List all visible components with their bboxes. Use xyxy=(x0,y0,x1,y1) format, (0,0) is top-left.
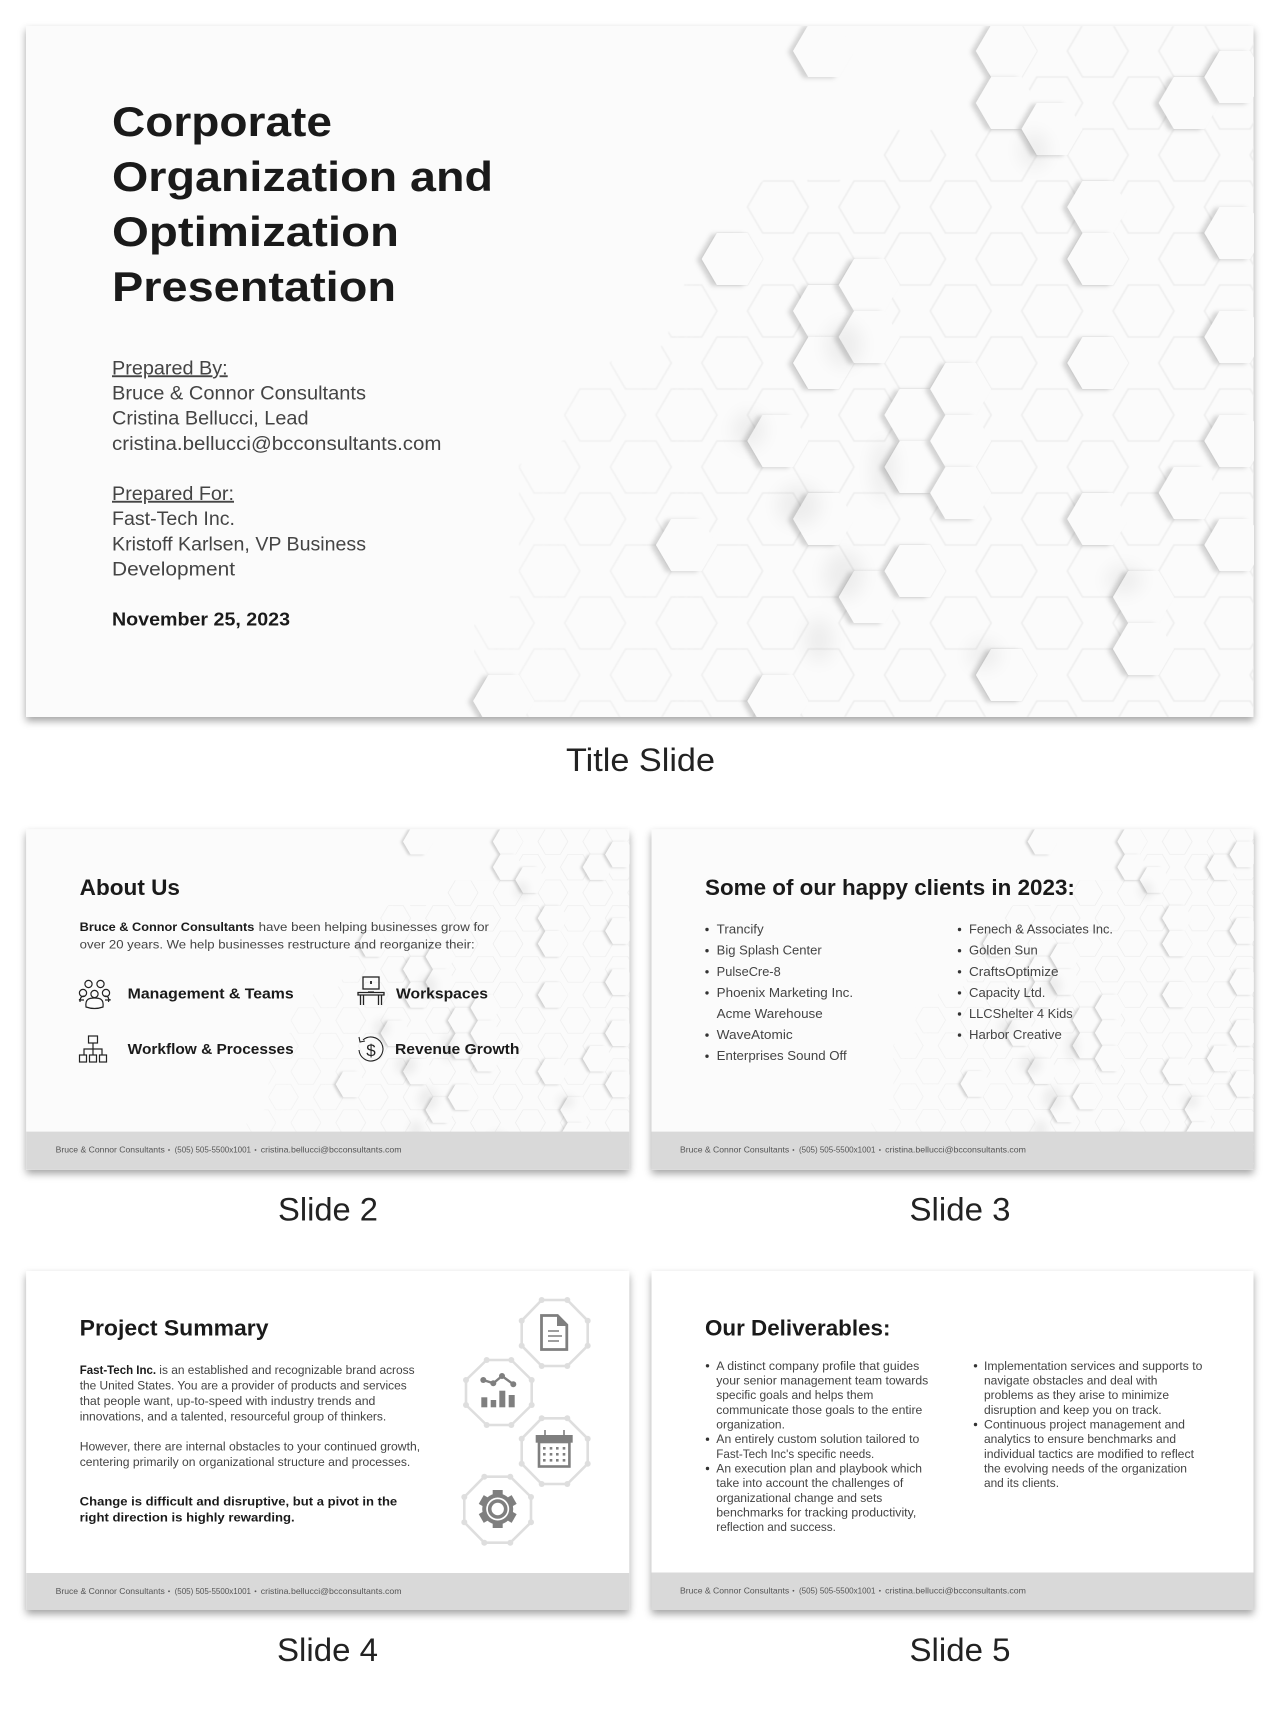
deliverables list: right column: problems as they arise to minimize xyxy=(984,1388,1169,1402)
paragraph: obstacles: However, there are internal obstacles to your continued growth, xyxy=(80,1440,420,1454)
client list: right column: Capacity Ltd. xyxy=(969,986,1045,1000)
title: Corporate xyxy=(112,98,332,145)
text block: prepared for: Development xyxy=(112,560,236,580)
deliverables list: left column: your senior management team towards xyxy=(716,1374,928,1388)
paragraph: company description: that people want, up-to-speed with industry trends and xyxy=(80,1394,376,1408)
footer bar: cristina.bellucci@bcconsultants.com xyxy=(261,1586,402,1596)
text block: prepared for: Kristoff Karlsen, VP Business xyxy=(112,534,366,555)
paragraph: company description: is an established and recognizable brand across xyxy=(159,1363,415,1377)
paragraph: company description: innovations, and a talented, resourceful group of thinkers. xyxy=(80,1409,386,1423)
footer bar: (505) 505-5500x1001 xyxy=(799,1145,876,1155)
footer bar xyxy=(652,1132,1254,1170)
paragraph: company description xyxy=(80,1363,415,1423)
deliverables list: right column: Implementation services and supports to xyxy=(984,1359,1202,1373)
callout: change statement: right direction is highly rewarding. xyxy=(80,1510,295,1524)
heading: Our Deliverables: xyxy=(705,1316,890,1341)
text block: prepared by: cristina.bellucci@bcconsultants.com xyxy=(112,434,441,455)
label: revenue growth: Revenue Growth xyxy=(395,1041,519,1058)
text block: prepared for xyxy=(112,484,366,580)
deliverables list: left column: An entirely custom solution tailored to xyxy=(716,1432,919,1446)
label: workspaces: Workspaces xyxy=(396,986,488,1002)
deliverables list: right column: and its clients. xyxy=(984,1476,1059,1490)
deliverables list: right column: navigate obstacles and deal with xyxy=(984,1374,1158,1388)
client list: left column: Big Splash Center xyxy=(717,944,822,958)
client list: left column: PulseCre-8 xyxy=(717,965,781,979)
date: November 25, 2023 xyxy=(112,609,290,629)
deliverables list: left column: An execution plan and playbook which xyxy=(716,1462,922,1476)
panel: slide 3 clients xyxy=(652,829,1259,1173)
text block: prepared by: Cristina Bellucci, Lead xyxy=(112,408,308,430)
footer bar: cristina.bellucci@bcconsultants.com xyxy=(261,1145,402,1155)
title: Presentation xyxy=(112,263,396,310)
text block: prepared for: Fast-Tech Inc. xyxy=(112,509,235,530)
deliverables list: right column: disruption and keep you on track. xyxy=(984,1403,1162,1417)
icon: gear in octagon xyxy=(461,1474,534,1546)
caption: slide 5: Slide 5 xyxy=(910,1632,1010,1668)
title: Optimization xyxy=(112,208,399,255)
paragraph: company description: the United States. You are a provider of products and services xyxy=(80,1379,407,1393)
footer bar: Bruce & Connor Consultants xyxy=(680,1145,789,1155)
footer bar: (505) 505-5500x1001 xyxy=(799,1586,876,1596)
icon: analytics chart in octagon xyxy=(463,1357,535,1428)
footer bar: Bruce & Connor Consultants xyxy=(56,1145,165,1155)
text block: prepared by: Prepared By: xyxy=(112,358,228,379)
title xyxy=(112,98,493,310)
client list: left column: WaveAtomic xyxy=(717,1028,793,1042)
icon: workspace desk xyxy=(358,977,384,1005)
paragraph: obstacles xyxy=(80,1440,420,1469)
intro text: have been helping businesses grow for xyxy=(259,920,489,934)
icon: revenue dollar cycle: $ xyxy=(366,1041,376,1060)
client list: left column: Acme Warehouse xyxy=(717,1007,823,1021)
deliverables list: left column: benchmarks for tracking productivity, xyxy=(716,1506,916,1520)
heading: Some of our happy clients in 2023: xyxy=(705,875,1075,900)
text block: prepared by: Bruce & Connor Consultants xyxy=(112,383,366,404)
footer bar: (505) 505-5500x1001 xyxy=(175,1586,251,1596)
deliverables list: right column: analytics to ensure benchmarks and xyxy=(984,1432,1176,1446)
deliverables list: right column: the evolving needs of the organization xyxy=(984,1462,1187,1476)
panel: slide 5 deliverables xyxy=(652,1271,1254,1610)
client list: right column xyxy=(958,922,1113,1042)
footer bar xyxy=(26,1573,629,1610)
footer bar: (505) 505-5500x1001 xyxy=(175,1145,251,1155)
deliverables list: right column: individual tactics are modified to reflect xyxy=(984,1447,1195,1461)
icon: management team xyxy=(79,980,110,1008)
client list: right column: Fenech & Associates Inc. xyxy=(969,922,1113,936)
client list: right column: Harbor Creative xyxy=(969,1028,1062,1042)
panel: title slide xyxy=(26,25,1265,727)
caption: slide 3: Slide 3 xyxy=(910,1192,1010,1228)
text block: prepared by xyxy=(112,358,441,455)
footer bar: Bruce & Connor Consultants xyxy=(680,1586,789,1596)
paragraph: company description: Fast-Tech Inc. xyxy=(80,1363,156,1377)
intro text: Bruce & Connor Consultants xyxy=(80,920,254,934)
callout: change statement xyxy=(80,1495,397,1524)
footer bar: cristina.bellucci@bcconsultants.com xyxy=(885,1145,1026,1155)
caption: title slide: Title Slide xyxy=(566,742,715,778)
footer bar: cristina.bellucci@bcconsultants.com xyxy=(885,1586,1026,1596)
client list: right column: Golden Sun xyxy=(969,944,1038,958)
deliverables list: right column xyxy=(974,1359,1202,1490)
deliverables list: left column: specific goals and helps them xyxy=(716,1388,873,1402)
panel: slide 2 about us xyxy=(26,829,635,1174)
client list: right column: CraftsOptimize xyxy=(969,965,1058,979)
icon: revenue dollar cycle xyxy=(359,1037,383,1061)
background: hexagon texture xyxy=(246,829,635,1174)
label: management and teams: Management & Teams xyxy=(128,986,294,1002)
client list: left column: Enterprises Sound Off xyxy=(717,1049,847,1063)
deliverables list: left column: communicate those goals to the entire xyxy=(716,1403,922,1417)
heading: Project Summary xyxy=(80,1316,269,1341)
paragraph: obstacles: centering primarily on organizational structure and processes. xyxy=(80,1455,410,1469)
background: hexagon texture xyxy=(871,829,1259,1173)
icon: calendar in octagon xyxy=(519,1415,591,1487)
heading: About Us xyxy=(80,875,180,900)
footer bar: Bruce & Connor Consultants xyxy=(56,1586,165,1596)
client list: left column: Phoenix Marketing Inc. xyxy=(717,986,853,1000)
intro text xyxy=(80,920,489,952)
footer bar xyxy=(652,1572,1254,1610)
caption: slide 4: Slide 4 xyxy=(277,1632,378,1668)
deliverables list: right column: Continuous project management and xyxy=(984,1418,1185,1432)
caption: slide 2: Slide 2 xyxy=(278,1192,378,1228)
deliverables list: left column: take into account the challenges of xyxy=(716,1476,904,1490)
deliverables list: left column: organization. xyxy=(716,1418,785,1432)
client list: left column xyxy=(705,922,853,1063)
deliverables list: left column: A distinct company profile that guides xyxy=(716,1359,919,1373)
icon: workflow org chart xyxy=(80,1036,106,1062)
text block: prepared for: Prepared For: xyxy=(112,484,234,505)
deliverables list: left column: Fast-Tech Inc's specific needs. xyxy=(716,1447,874,1461)
callout: change statement: Change is difficult and disruptive, but a pivot in the xyxy=(80,1495,397,1509)
background: hexagon texture xyxy=(473,25,1265,727)
deliverables list: left column: reflection and success. xyxy=(716,1520,836,1534)
label: workflow and processes: Workflow & Processes xyxy=(128,1041,294,1058)
title: Organization and xyxy=(112,153,493,200)
client list: left column: Trancify xyxy=(717,922,764,936)
panel: slide 4 project summary xyxy=(26,1271,629,1610)
footer bar xyxy=(26,1132,629,1170)
intro text: over 20 years. We help businesses restructure and reorganize their: xyxy=(80,938,475,952)
client list: right column: LLCShelter 4 Kids xyxy=(969,1007,1073,1021)
deliverables list: left column xyxy=(706,1359,928,1534)
icon: document in octagon xyxy=(519,1297,591,1369)
deliverables list: left column: organizational change and sets xyxy=(716,1491,882,1505)
